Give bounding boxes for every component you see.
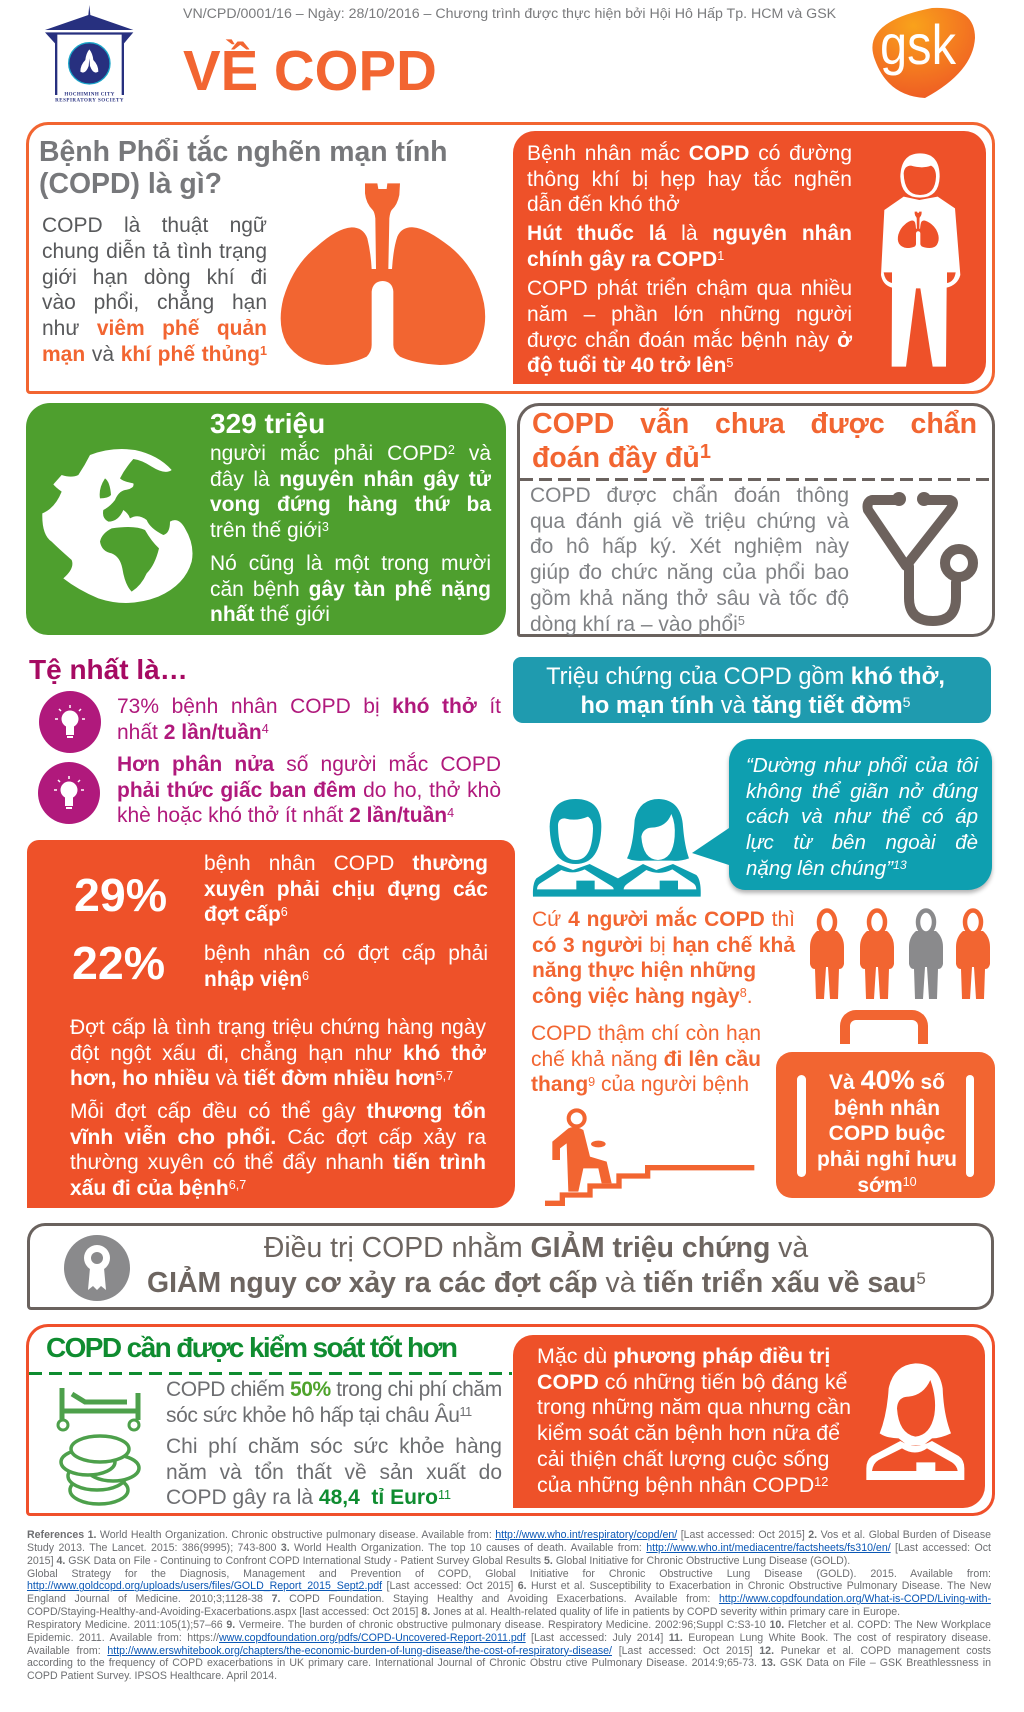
heading: what is COPD: Bệnh Phổi tắc nghẽn mạn tính [39,136,448,168]
references: COPD/Staying-Healthy-and-Avoiding-Exacerbations.aspx [last accessed: Oct 2015] 8. Jones at al. Health-related quality of life in patients by COPD severity within primary care in Europe. [27,1606,900,1618]
text: quality of life: cải thiện chất lượng cuộc sống [537,1447,829,1471]
text: 3 of 4 limited: Cứ 4 người mắc COPD thì [532,908,795,931]
text: stair climbing: COPD thậm chí còn hạn [531,1022,761,1045]
header reference line: VN/CPD/0001/16 – Ngày: 28/10/2016 – Chương trình được thực hiện bởi Hội Hô Hấp Tp. HCM và GSK [183,6,836,22]
text: permanent damage: thường xuyên có thể đẩy nhanh tiến trình [70,1151,486,1174]
text: stair climbing [531,1022,761,1096]
text: exacerbation definition: hơn, ho nhiều và tiết đờm nhiều hơn5,7 [70,1067,453,1090]
text: 22% hospitalised: bệnh nhân có đợt cấp phải [204,942,488,965]
text: exacerbation definition: đột ngột xấu đi, chẳng hạn như khó thở [70,1042,486,1065]
references: Respiratory Medicine. 2011:105(1);57–66 9. Vermeire. The burden of chronic obstructive pulmonary disease. Respiratory Medicine. 2002:96;Suppl C:S3-10 10. Fletcher et al. COPD: The New Workplace [27,1619,991,1631]
text: symptoms [546,664,945,719]
text: 3 of 4 limited: có 3 người bị hạn chế khả [532,934,795,957]
text: quote: không thể giãn nở đúng [746,780,978,803]
text: quality of life: trong những năm qua nhưng cần [537,1395,851,1419]
text: diagnosis: giúp đo chức năng của phổi bao [530,561,849,584]
text: diagnosis [530,484,850,636]
heading: better control: COPD cần được kiểm soát tốt hơn [46,1332,456,1363]
panel: COPD causes [513,131,986,384]
text: quality of life [537,1344,851,1497]
text: 22% hospitalised: nhập viện6 [204,968,309,991]
callout: patient quote [692,739,994,896]
text: annual cost: COPD gây ra là 48,4 tỉ Euro11 [166,1486,451,1509]
suitcase handle [840,1010,928,1044]
text: quote: nặng lên chúng”13 [746,857,907,880]
text: permanent damage: Mỗi đợt cấp đều có thể gây thương tổn [70,1100,486,1123]
text: 40% retire early: phải nghỉ hưu [817,1148,957,1171]
text: diagnosis: gồm khả năng thở sâu và tốc độ [530,587,849,610]
text: permanent damage: xấu đi của bệnh6,7 [70,1177,246,1200]
text: 29% frequent exacerbations: đợt cấp6 [204,903,288,926]
text: treatment goal [147,1231,926,1299]
text: annual cost: Chi phí chăm sóc sức khỏe hàng [166,1435,502,1458]
text: cost share: COPD chiếm 50% trong chi phí chăm [166,1378,502,1401]
text: cost share [166,1378,502,1427]
text: global burden: vong đứng hàng thứ ba [210,493,491,516]
text: waking at night [117,752,501,827]
text: COPD definition [42,214,267,366]
speech bubble tail [692,828,729,865]
logo: Ho Chi Minh City Respiratory Society: HOCHIMINH CITY [64,93,115,98]
text: quote: “Dường như phổi của tôi [746,754,978,777]
heading: underdiagnosed: đoán đầy đủ1 [532,441,711,474]
text: treatment goal: GIẢM nguy cơ xảy ra các đợt cấp và tiến triển xấu về sau5 [147,1267,926,1299]
heading: what is COPD: (COPD) là gì? [39,168,222,200]
icon: hospital bed [56,1388,140,1432]
text: COPD definition: giới hạn dòng khí đi [42,266,267,289]
heading: worse still: Tệ nhất là… [29,654,188,685]
text: quote: cách và như thể có áp [746,805,978,828]
text: permanent damage [70,1100,486,1200]
text: causes: được chẩn đoán mắc bệnh này ở [527,329,852,352]
text: 3 of 4 limited: năng thực hiện những [532,959,756,982]
text: symptoms: ho mạn tính và tăng tiết đờm5 [580,693,911,719]
icon: light bulb [38,762,100,824]
text: quality of life: kiểm soát căn bệnh hơn nữa để [537,1421,840,1445]
text: diagnosis: dòng khí ra – vào phổi5 [530,613,745,636]
icon: stethoscope [862,492,978,626]
text: 29% frequent exacerbations [204,852,488,926]
suitcase: early retirement [776,1010,995,1198]
panel: what is COPD [26,122,995,394]
heading: underdiagnosed: COPD vẫn chưa được chẩn [532,408,977,440]
text: COPD definition: chung diễn tả tình trạng [42,240,267,263]
text: causes: COPD phát triển chậm qua nhiều [527,277,852,300]
stat: 29%: 29% [74,869,167,921]
banner: symptoms [513,657,991,723]
text: quote [746,754,978,880]
panel: COPD underdiagnosed [517,403,995,637]
references: Epidemic. 2011. Available from: https://www.copdfoundation.org/pdfs/COPD-Uncovered-Report-2011.pdf [Last accessed: July 2014] 11. European Lung White Book. The cost of respiratory disease. [27,1632,991,1644]
panel: 329 million [26,403,506,635]
text: diagnosis: đo hô hấp ký. Xét nghiệm này [530,535,849,558]
text: causes: thông khí bị hẹp hay tắc nghẽn [527,168,852,191]
stat: 22%: 22% [72,937,165,989]
panel: exacerbations [27,840,515,1208]
title: VỀ COPD [183,39,437,102]
icon: woman [862,1355,992,1490]
text: diagnosis: COPD được chẩn đoán thông [530,484,849,507]
text: quality of life: COPD có những tiến bộ đáng kể [537,1370,847,1394]
logo: Ho Chi Minh City Respiratory Society [45,5,134,103]
references: according to the frequency of COPD exacerbations in UK primary care. International Journal of Chronic Obstru ctive Pulmonary Disease. 2014:9;65-73. 13. GSK Data on File – GSK Breathlessness in [27,1657,991,1669]
text: 29% frequent exacerbations: bệnh nhân COPD thường [204,852,488,875]
text: breathlessness: nhất 2 lần/tuần4 [117,721,269,744]
icon: light bulb [39,691,101,753]
text: global burden: nhất thế giới [210,603,330,626]
text: causes: Hút thuốc lá là nguyên nhân [527,222,852,245]
text: 40% retire early [817,1065,957,1197]
text: global burden [210,441,492,626]
text: 29% frequent exacerbations: xuyên phải chịu đựng các [204,878,488,901]
text: cost share: sóc sức khỏe hô hấp tại châu Âu11 [166,1404,472,1427]
text: 40% retire early: COPD buộc [829,1122,945,1145]
icon: coins [59,1434,141,1506]
icon: earth [42,449,192,603]
logo: GSK: gsk [880,13,957,76]
references: Global Strategy for the Diagnosis, Management and Prevention of COPD, Global Initiative for Chronic Obstructive Lung Disease (GOLD). 2015. Available from: [27,1568,991,1580]
references [27,1529,991,1683]
text: exacerbation definition: Đợt cấp là tình trạng triệu chứng hàng ngày [70,1016,486,1039]
text: causes: Bệnh nhân mắc COPD có đường [527,142,852,165]
text: causes: độ tuổi từ 40 trở lên5 [527,354,733,377]
text: global burden: căn bệnh gây tàn phế nặng [210,578,491,601]
references: COPD Patient Survey. IPSOS Healthcare. April 2014. [27,1670,277,1682]
speech bubble [729,739,992,890]
references: Study 2013. The Lancet. 2015: 386(9995); 743-800 3. World Health Organization. The top 10 causes of death. Available from: http://www.who.int/mediacentre/factsheets/fs310/en/ [Last accessed: Oct [27,1542,991,1554]
references: Available from: http://www.erswhitebook.org/chapters/the-economic-burden-of-lung-disease/the-cost-of-respiratory-disease/ [Last accessed: Oct 2015] 12. Punekar et al. COPD management costs [27,1645,991,1657]
text: global burden: trên thế giới3 [210,519,329,542]
text: waking at night: khè hoặc khó thở ít nhất 2 lần/tuần4 [117,804,454,827]
text: quality of life: Mặc dù phương pháp điều trị [537,1344,830,1368]
suitcase body [776,1052,995,1198]
icon: lungs [280,183,486,365]
text: global burden: Nó cũng là một trong mười [210,552,491,575]
icon: person with lungs [881,153,960,367]
panel: COPD needs better control [26,1324,995,1516]
logo: Ho Chi Minh City Respiratory Society: RESPIRATORY SOCIETY [55,98,124,103]
text: COPD definition: như viêm phế quản [42,317,267,340]
text: 40% retire early: bệnh nhân [834,1097,940,1120]
text: 3 of 4 limited [532,906,796,1008]
text: COPD definition: vào phổi, chẳng hạn [42,291,267,314]
text: annual cost [166,1435,502,1509]
text: causes [527,141,852,377]
text: treatment goal: Điều trị COPD nhằm GIẢM triệu chứng và [264,1232,808,1264]
stat: 329 million: 329 triệu [210,408,325,439]
text: waking at night: Hơn phân nửa số người mắc COPD [117,753,501,776]
icon: man and woman [532,799,701,897]
text: stair climbing: chế khả năng đi lên cầu [531,1048,761,1071]
text: 22% hospitalised [204,942,488,991]
references: England Journal of Medicine. 2010;3;1128-38 7. COPD Foundation. Staying Healthy and Avoiding Exacerbations. Available from: http://www.copdfoundation.org/What-is-COPD/Living-with- [27,1593,991,1605]
text: COPD definition: mạn và khí phế thủng1 [42,343,267,366]
references: References 1. World Health Organization. Chronic obstructive pulmonary disease. Available from: http://www.who.int/respiratory/copd/en/ [Last accessed: Oct 2015] 2. Vos et al. Global Burden of Disease [27,1529,991,1541]
text: COPD definition: COPD là thuật ngữ [42,214,267,237]
references: 2015] 4. GSK Data on File - Continuing to Confront COPD International Study - Patient Survey Global Results 5. Global Initiative for Chronic Obstructive Lung Disease (GOLD). [27,1555,850,1567]
stat: waking at night [38,752,501,827]
text: annual cost: năm và tổn thất về sản xuất do [166,1461,502,1484]
text: diagnosis: qua đánh giá về triệu chứng và [530,510,849,533]
text: global burden: người mắc phải COPD2 và [210,442,491,465]
text: causes: dẫn đến khó thở [527,193,680,216]
text: 40% retire early: Và 40% số [829,1065,945,1095]
text: breathlessness: 73% bệnh nhân COPD bị khó thở ít [117,695,501,718]
stat: breathlessness twice a week [39,691,501,753]
heading: underdiagnosed [532,408,977,474]
icon: award medal [64,1235,130,1301]
panel: quality of life [513,1335,985,1508]
text: waking at night: phải thức giấc ban đêm do ho, thở khò [117,779,501,802]
text: global burden: đây là nguyên nhân gây tử [210,468,491,491]
text: symptoms: Triệu chứng của COPD gồm khó thở, [546,664,945,690]
icon: person climbing stairs [545,1108,754,1206]
text: causes: chính gây ra COPD1 [527,248,724,271]
logo: GSK [872,8,975,98]
text: 40% retire early: sớm10 [857,1174,917,1197]
icon: four people, three highlighted [810,908,990,999]
text: 3 of 4 limited: công việc hàng ngày8. [532,985,753,1008]
references: http://www.goldcopd.org/uploads/users/files/GOLD_Report_2015_Sept2.pdf [Last accessed: Oct 2015] 6. Hurst et al. Susceptibility to Exacerbation in Chronic Obstructive Pulmonary Disease. The New [27,1580,991,1592]
text: permanent damage: vĩnh viễn cho phổi. Các đợt cấp xảy ra [70,1126,486,1149]
text: exacerbation definition [70,1016,486,1090]
heading: what is COPD [39,135,448,200]
text: causes: năm – phần lớn những người [527,303,852,326]
text: stair climbing: thang9 của người bệnh [531,1073,749,1096]
text: quote: lực từ bên ngoài đè [746,831,978,854]
panel: treatment goal [27,1223,994,1310]
text: quality of life: của những bệnh nhân COPD12 [537,1473,828,1497]
text: breathlessness [117,695,501,744]
